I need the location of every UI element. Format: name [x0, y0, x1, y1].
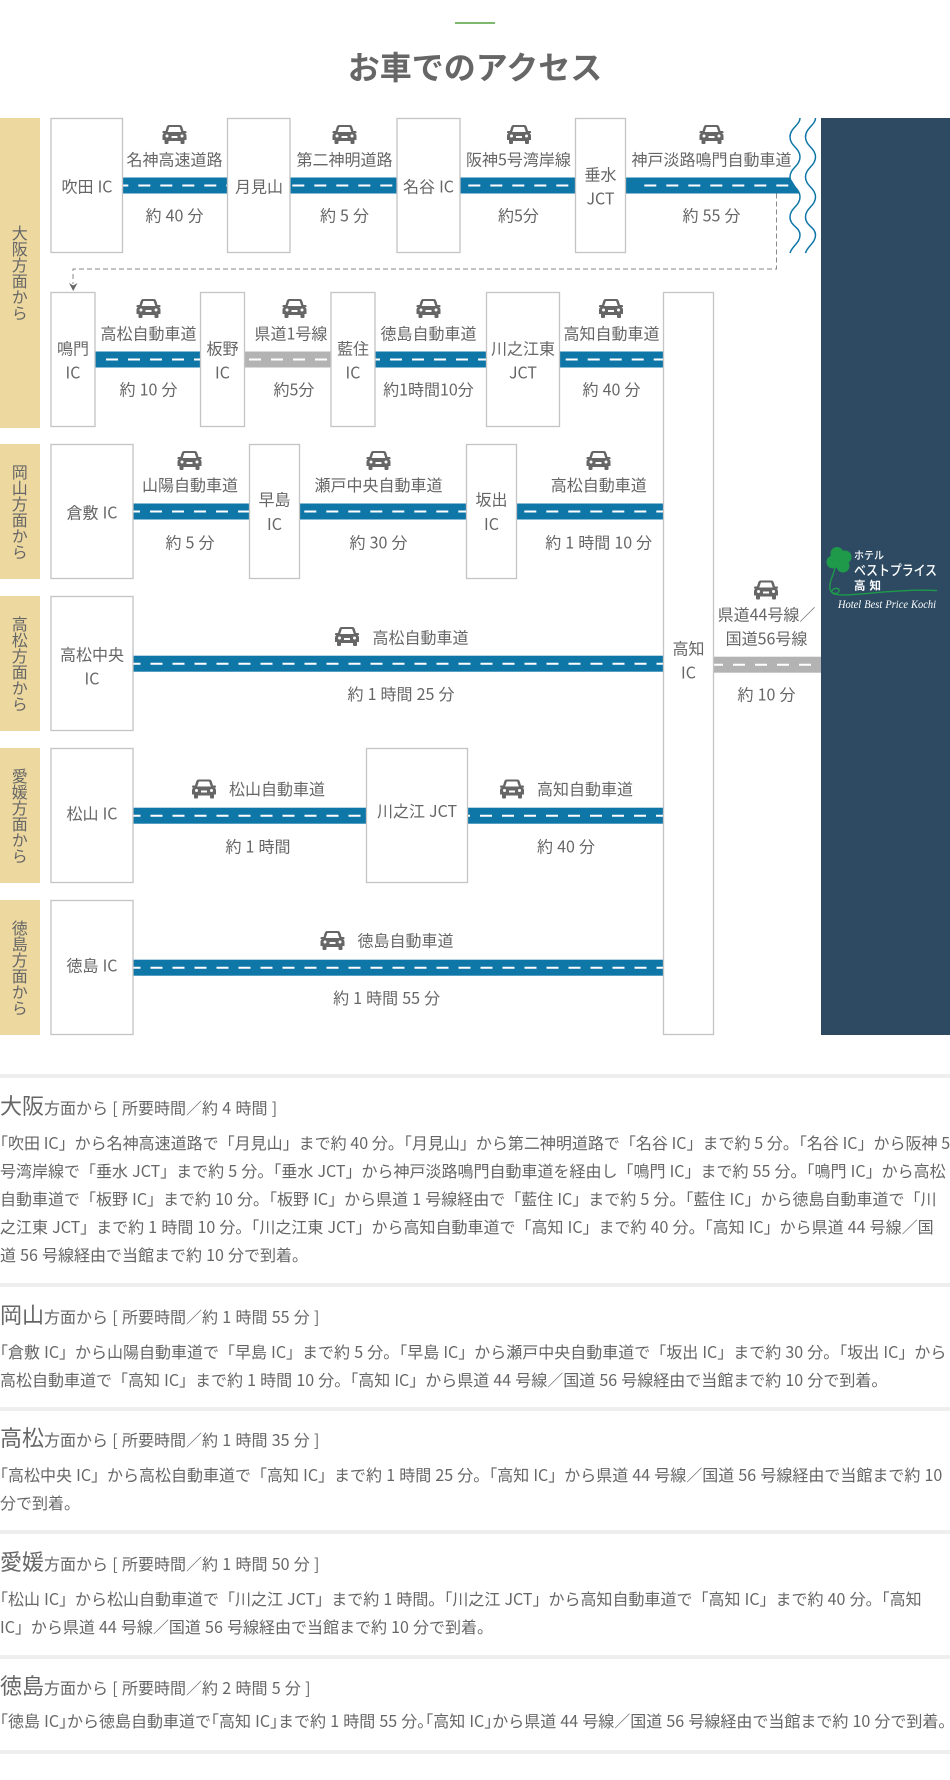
segment: 瀬戸中央自動車道: 瀬戸中央自動車道	[314, 472, 443, 496]
road: 県道44号線／国道56号線	[714, 657, 821, 673]
road: 松山自動車道	[133, 808, 366, 824]
heading: 愛媛: 愛媛方面から [ 所要時間／約 1 時間 50 分 ]	[0, 1545, 319, 1577]
box: 川之江 JCT: 川之江 JCT	[377, 798, 457, 822]
box: 月見山: 月見山	[235, 174, 283, 198]
segment: 松山自動車道: 松山自動車道	[229, 776, 325, 800]
segment: 高松自動車道 row 2: 約 10 分	[120, 376, 177, 400]
box: 倉敷 IC	[51, 444, 133, 578]
segment: 県道44号線／国道56号線: 約 10 分	[738, 682, 795, 706]
box: 松山 IC	[51, 748, 133, 882]
road: 瀬戸中央自動車道	[300, 504, 466, 520]
box: 高松中央 IC	[51, 596, 133, 730]
box: 川之江 JCT	[366, 748, 468, 882]
segment: 県道1号線: 県道1号線	[255, 320, 327, 344]
segment: 徳島自動車道 row 2: 徳島自動車道	[380, 320, 477, 344]
heading: 岡山: 岡山方面から [ 所要時間／約 1 時間 55 分 ]	[0, 1298, 319, 1330]
segment: 第二神明道路: 約 5 分	[320, 202, 369, 226]
road: 高松自動車道 row 3	[517, 504, 663, 520]
text: 大阪 route: 号湾岸線で「垂水 JCT」まで約 5 分。「垂水 JCT」から神戸淡路鳴門自動車道を経由し「鳴門 IC」まで約 55 分。「鳴門 IC」から高松	[0, 1158, 946, 1182]
text: 岡山 route: 「倉敷 IC」から山陽自動車道で「早島 IC」まで約 5 分。「早島 IC」から瀬戸中央自動車道で「坂出 IC」まで約 30 分。「坂出 IC」から	[0, 1339, 946, 1363]
text: 岡山 route	[0, 1339, 946, 1391]
text: 愛媛 route: 「松山 IC」から松山自動車道で「川之江 JCT」まで約 1 時間。「川之江 JCT」から高知自動車道で「高知 IC」まで約 40 分。「高知	[0, 1586, 922, 1610]
box: 高知 IC	[664, 292, 714, 1034]
section: 大阪	[0, 1089, 950, 1266]
segment: 高松自動車道 row 3	[545, 451, 652, 554]
segment: 山陽自動車道: 約 5 分	[165, 530, 215, 554]
segment: 名神高速道路: 名神高速道路	[126, 146, 223, 170]
road: 第二神明道路	[290, 178, 397, 194]
origin band: 高松方面から	[0, 596, 40, 731]
box: 板野 IC	[200, 292, 244, 426]
segment: 高松自動車道 row 4: 約 1 時間 25 分	[348, 681, 454, 705]
origin band: 大阪方面から: 大阪方面から	[8, 225, 32, 321]
segment: 高松自動車道 row 3: 高松自動車道	[551, 472, 647, 496]
segment: 高松自動車道 row 2: 高松自動車道	[100, 320, 197, 344]
box: 松山 IC: 松山 IC	[67, 800, 117, 824]
box: 徳島 IC: 徳島 IC	[67, 952, 117, 976]
road: 高知自動車道 row 2	[560, 352, 663, 368]
segment: 神戸淡路鳴門自動車道	[631, 125, 792, 226]
text: 大阪 route: 之江東 JCT」まで約 1 時間 10 分。「川之江東 JCT」から高知自動車道で「高知 IC」まで約 40 分。「高知 IC」から県道 44 号線／国	[0, 1214, 934, 1238]
segment: 徳島自動車道 row 2: 約1時間10分	[383, 376, 474, 400]
segment: 高知自動車道 row 5	[500, 776, 633, 858]
box: 名谷 IC	[397, 118, 460, 252]
origin band: 徳島方面から: 徳島方面から	[8, 920, 32, 1016]
box: 鳴門 IC: 鳴門	[57, 336, 89, 360]
segment: 徳島自動車道 row 6: 約 1 時間 55 分	[333, 985, 440, 1009]
box: 鳴門 IC: IC	[66, 360, 80, 384]
segment: 高知自動車道 row 5: 約 40 分	[537, 834, 595, 858]
box: 徳島 IC	[51, 900, 133, 1034]
origin band: 徳島方面から	[0, 900, 40, 1035]
box: 吹田 IC: 吹田 IC	[62, 174, 112, 198]
road: 高松自動車道 row 4	[133, 656, 663, 672]
segment: 阪神5号湾岸線: 阪神5号湾岸線	[466, 146, 571, 170]
hotel logo: 高知	[854, 578, 881, 594]
box: 早島 IC: IC	[267, 511, 282, 535]
box: 吹田 IC	[51, 118, 122, 252]
box: 板野 IC: IC	[215, 360, 230, 384]
heading: 徳島: 徳島方面から [ 所要時間／約 2 時間 5 分 ]	[0, 1669, 311, 1701]
segment: 第二神明道路: 第二神明道路	[296, 146, 393, 170]
section: 徳島	[0, 1669, 946, 1732]
box: 坂出 IC	[466, 444, 516, 578]
box: 高知 IC: 高知	[672, 636, 705, 660]
section: 愛媛	[0, 1545, 922, 1638]
segment: 徳島自動車道 row 6	[320, 928, 454, 1009]
segment: 阪神5号湾岸線: 約5分	[498, 202, 539, 226]
box: 倉敷 IC: 倉敷 IC	[67, 500, 117, 524]
hotel logo: Hotel Best Price Kochi	[837, 599, 936, 611]
text: 高松 route	[0, 1462, 942, 1514]
segment: 高知自動車道 row 2: 約 40 分	[583, 376, 640, 400]
segment: 高松自動車道 row 4: 高松自動車道	[372, 624, 469, 648]
text: 愛媛 route: IC」から県道 44 号線／国道 56 号線経由で当館まで約 10 分で到着。	[0, 1614, 493, 1638]
text: 高松 route: 「高松中央 IC」から高松自動車道で「高知 IC」まで約 1 時間 25 分。「高知 IC」から県道 44 号線／国道 56 号線経由で当館まで約 10	[0, 1462, 942, 1486]
origin band: 岡山方面から: 岡山方面から	[8, 464, 32, 560]
road: 高松自動車道 row 2	[95, 352, 200, 368]
segment: 瀬戸中央自動車道	[314, 451, 443, 554]
box: 藍住 IC: 藍住	[337, 336, 369, 360]
origin band: 愛媛方面から	[0, 748, 40, 883]
box: 藍住 IC: IC	[346, 360, 360, 384]
origin band: 愛媛方面から: 愛媛方面から	[8, 768, 32, 864]
box: 垂水 JCT: 垂水	[584, 162, 617, 186]
segment: 県道44号線／国道56号線: 国道56号線	[726, 626, 807, 650]
segment: 阪神5号湾岸線	[466, 125, 571, 226]
segment: 県道1号線	[255, 299, 327, 400]
segment: 第二神明道路	[296, 125, 393, 226]
box: 川之江東 JCT: 川之江東	[491, 336, 555, 360]
road: 徳島自動車道 row 2	[375, 352, 486, 368]
segment: 高松自動車道 row 4	[335, 624, 469, 705]
segment: 松山自動車道	[192, 776, 325, 858]
text: 高松 route: 分で到着。	[0, 1490, 80, 1514]
road: 山陽自動車道	[133, 504, 249, 520]
title accent line	[455, 22, 495, 24]
segment: 名神高速道路: 約 40 分	[146, 202, 203, 226]
segment: 徳島自動車道 row 2	[380, 299, 477, 400]
text: 愛媛 route	[0, 1586, 922, 1638]
road: 県道1号線	[244, 352, 331, 368]
hotel logo: ホテル	[854, 547, 884, 563]
text: 岡山 route: 高松自動車道で「高知 IC」まで約 1 時間 10 分。「高知 IC」から県道 44 号線／国道 56 号線経由で当館まで約 10 分で到着。	[0, 1367, 887, 1391]
heading: 大阪: 大阪方面から [ 所要時間／約 4 時間 ]	[0, 1089, 277, 1121]
box: 垂水 JCT: JCT	[586, 186, 615, 210]
text: 大阪 route: 自動車道で「板野 IC」まで約 10 分。「板野 IC」から県道 1 号線経由で「藍住 IC」まで約 5 分。「藍住 IC」から徳島自動車道で「川	[0, 1186, 936, 1210]
box: 坂出 IC: IC	[484, 511, 499, 535]
segment: 高知自動車道 row 2: 高知自動車道	[563, 320, 660, 344]
segment: 高知自動車道 row 5: 高知自動車道	[537, 776, 633, 800]
hotel panel	[821, 118, 950, 1035]
segment: 山陽自動車道	[142, 451, 238, 554]
section: 高松	[0, 1421, 942, 1514]
origin band: 岡山方面から	[0, 444, 40, 579]
segment: 高松自動車道 row 2	[100, 299, 197, 400]
road: 阪神5号湾岸線	[460, 178, 575, 194]
box: 高松中央 IC: IC	[85, 666, 99, 690]
road: 名神高速道路	[122, 178, 227, 194]
box: 名谷 IC: 名谷 IC	[403, 174, 454, 198]
box: 鳴門 IC	[51, 292, 95, 426]
road: 神戸淡路鳴門自動車道	[626, 178, 800, 194]
origin band: 高松方面から: 高松方面から	[8, 616, 32, 712]
box: 坂出 IC: 坂出	[475, 486, 508, 510]
segment: 山陽自動車道: 山陽自動車道	[142, 472, 238, 496]
box: 川之江東 JCT: JCT	[509, 360, 537, 384]
text: 大阪 route: 「吹田 IC」から名神高速道路で「月見山」まで約 40 分。「月見山」から第二神明道路で「名谷 IC」まで約 5 分。「名谷 IC」から阪神 5	[0, 1130, 950, 1154]
title: お車でのアクセス	[348, 43, 602, 89]
origin band: 大阪方面から	[0, 118, 40, 428]
segment: 名神高速道路	[126, 125, 223, 226]
text: 大阪 route: 道 56 号線経由で当館まで約 10 分で到着。	[0, 1242, 308, 1266]
segment: 県道44号線／国道56号線: 県道44号線／	[718, 602, 815, 626]
hotel logo	[826, 547, 937, 611]
dashed connector arrow	[69, 194, 776, 291]
section: 岡山	[0, 1298, 946, 1391]
text: 大阪 route	[0, 1130, 950, 1266]
hotel logo: ベストプライス	[854, 560, 937, 580]
box: 早島 IC	[250, 444, 300, 578]
road: 高知自動車道 row 5	[468, 808, 663, 824]
wave break lines	[790, 118, 816, 253]
box: 川之江東 JCT	[486, 292, 560, 426]
box: 板野 IC: 板野	[206, 336, 239, 360]
box: 高知 IC: IC	[681, 660, 696, 684]
box: 藍住 IC	[331, 292, 375, 426]
heading: 高松: 高松方面から [ 所要時間／約 1 時間 35 分 ]	[0, 1421, 319, 1453]
route diagram	[50, 118, 950, 1036]
segment: 神戸淡路鳴門自動車道: 約 55 分	[683, 202, 740, 226]
segment: 県道44号線／国道56号線	[718, 580, 815, 706]
box: 高松中央 IC: 高松中央	[60, 642, 124, 666]
box: 早島 IC: 早島	[258, 486, 291, 510]
segment: 徳島自動車道 row 6: 徳島自動車道	[358, 928, 454, 952]
segment: 松山自動車道: 約 1 時間	[225, 834, 291, 858]
segment: 高松自動車道 row 3: 約 1 時間 10 分	[545, 530, 652, 554]
segment: 県道1号線: 約5分	[274, 376, 314, 400]
box: 月見山	[228, 118, 290, 252]
segment: 瀬戸中央自動車道: 約 30 分	[350, 530, 407, 554]
segment: 神戸淡路鳴門自動車道: 神戸淡路鳴門自動車道	[631, 146, 792, 170]
segment: 高知自動車道 row 2	[563, 299, 660, 400]
text: 徳島 route: 「徳島 IC」から徳島自動車道で「高知 IC」まで約 1 時間 55 分。「高知 IC」から県道 44 号線／国道 56 号線経由で当館まで約 10 分で到着。	[0, 1708, 946, 1732]
box: 垂水 JCT	[576, 118, 626, 252]
road: 徳島自動車道 row 6	[133, 960, 663, 976]
